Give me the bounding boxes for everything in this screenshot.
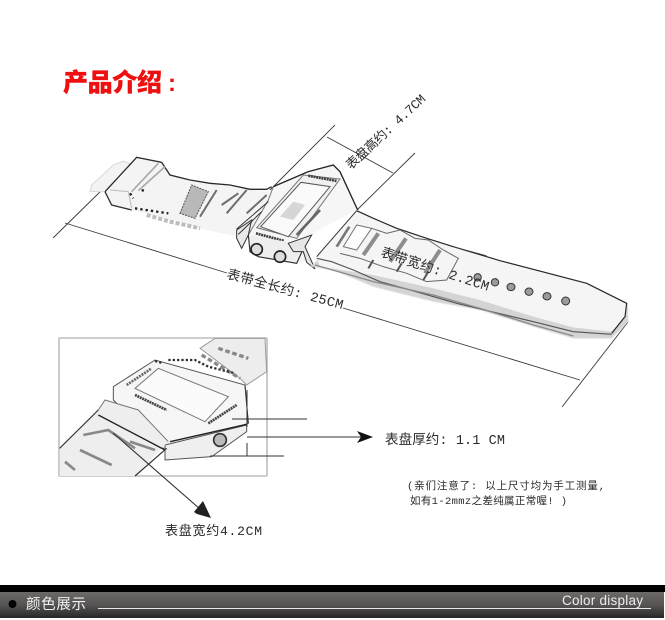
thickness guide lines [210, 390, 307, 456]
arrow: dial thickness [247, 431, 373, 443]
dimension lines: overall length [53, 187, 628, 407]
label: strap width: 表带宽约: 2.2CM [378, 244, 491, 296]
note: 如有1-2mmz之差纯属正常喔! ) [410, 494, 567, 508]
label: dial height: 表盘高约: 4.7CM [343, 91, 429, 173]
dimension lines: dial height [270, 125, 415, 210]
title: 产品介绍 [63, 69, 162, 97]
English heading: Color display [562, 593, 643, 608]
note: (亲们注意了: 以上尺寸均为手工测量, [407, 479, 605, 493]
strap holes [474, 274, 570, 305]
inset watch sketch [60, 338, 267, 476]
watch illustration: dial [237, 165, 358, 269]
bracelet links [337, 225, 458, 282]
note [407, 479, 605, 508]
label: dial thickness: 表盘厚约: 1.1 CM [385, 431, 505, 449]
section bar: color display [0, 585, 665, 618]
section heading: 颜色展示 [26, 596, 86, 613]
inset photo panel [59, 338, 267, 476]
bullet [8, 600, 16, 608]
label: overall strap length: 表带全长约: 25CM [225, 265, 345, 314]
watch illustration: left strap [90, 157, 272, 237]
section underline [98, 608, 651, 609]
arrow: dial width [113, 433, 211, 518]
watch illustration: right strap [310, 211, 628, 338]
label: dial width: 表盘宽约4.2CM [165, 523, 262, 539]
lug connectors [237, 202, 268, 248]
title: : [168, 70, 176, 97]
dial body [248, 165, 358, 263]
